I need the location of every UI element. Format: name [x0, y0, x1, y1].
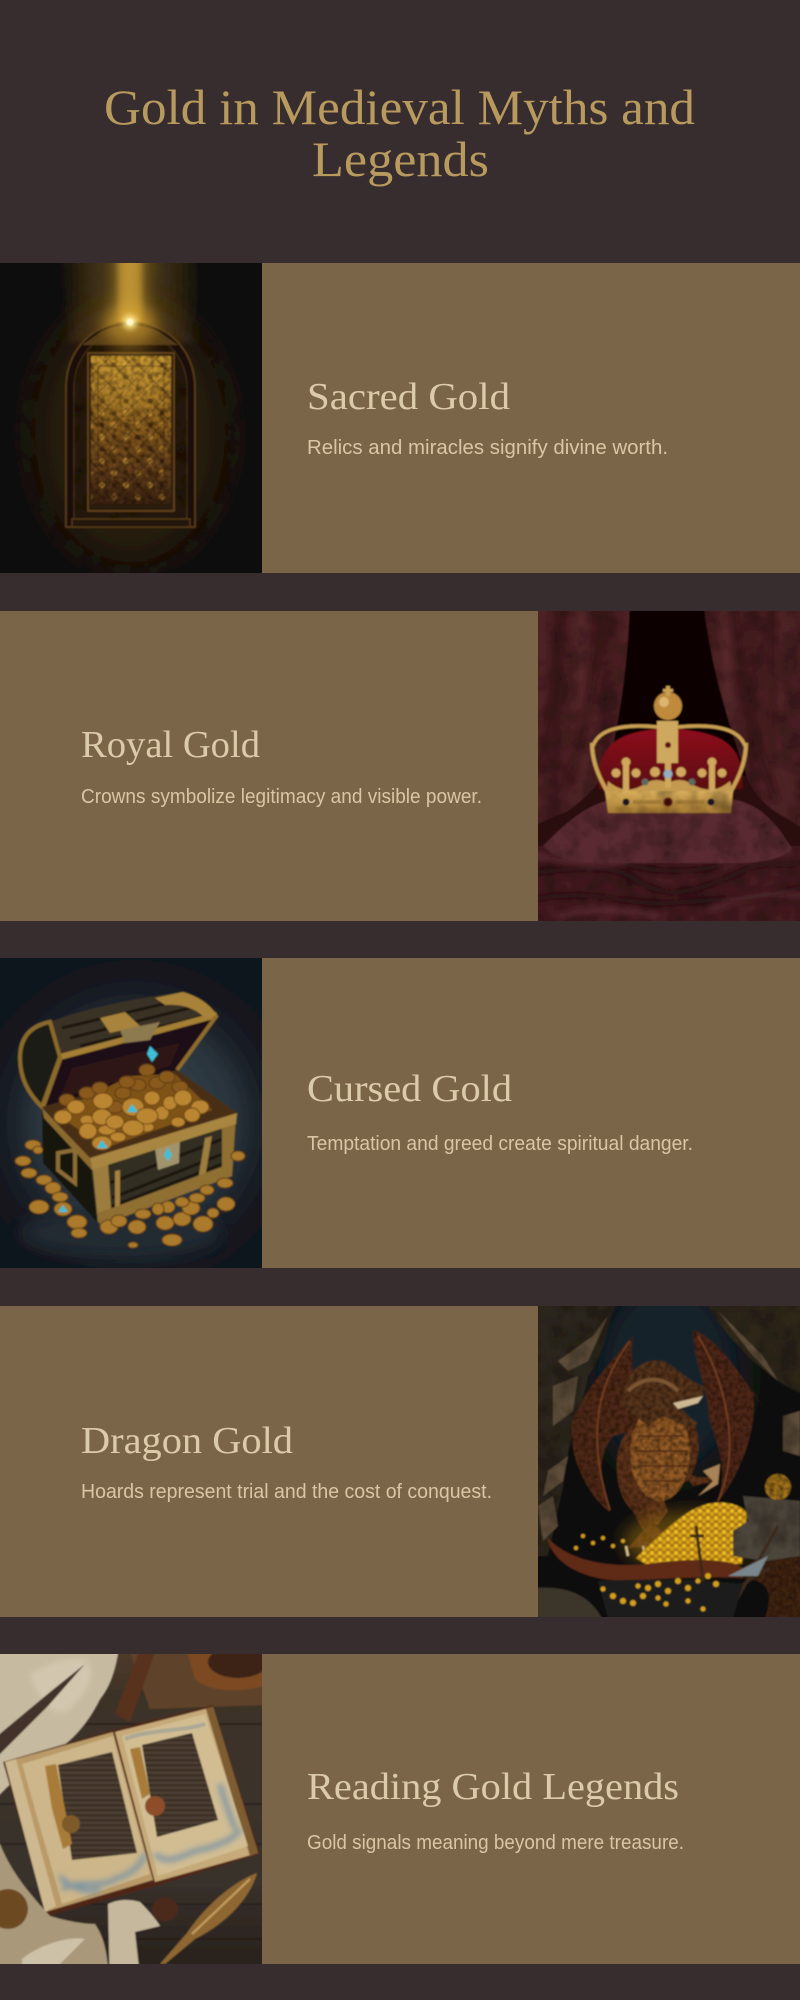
panel: sacred gold [0, 263, 800, 573]
heading: royal gold: Royal Gold [81, 724, 260, 766]
back lid [52, 992, 200, 1054]
heading: reading gold legends: Reading Gold Legends [307, 1766, 679, 1808]
dragon [571, 1330, 777, 1548]
panel: cursed gold [0, 958, 800, 1268]
quill [0, 1664, 85, 1759]
illuminated capitals [45, 1764, 72, 1849]
panel: dragon gold [0, 1306, 800, 1617]
panel: reading gold legends [0, 1654, 800, 1964]
cup [188, 1654, 262, 1691]
ornaments [60, 1854, 145, 1891]
ink roll [115, 1654, 154, 1722]
cloth bottom left [0, 1843, 108, 1964]
rocks and orb [733, 1496, 800, 1561]
image: dragon guarding gold hoard [538, 1306, 800, 1617]
floor coins [15, 1140, 245, 1248]
image: jeweled crown on velvet pillow [538, 611, 800, 921]
title: Legends [312, 131, 489, 187]
text blocks [58, 1752, 137, 1860]
heading: dragon gold: Dragon Gold [81, 1420, 293, 1462]
title: Gold in Medieval Myths and [104, 79, 695, 135]
title [104, 79, 695, 187]
floor coins [574, 1534, 719, 1612]
image: illuminated manuscript on wooden desk [0, 1654, 262, 1964]
sword [690, 1525, 705, 1582]
text: cursed gold description: Temptation and greed create spiritual danger. [307, 1133, 693, 1155]
text: sacred gold description: Relics and miracles signify divine worth. [307, 437, 668, 459]
text: royal gold description: Crowns symbolize legitimacy and visible power. [81, 786, 482, 808]
bottom feather [160, 1873, 257, 1964]
rim and coin pile [42, 1070, 237, 1158]
image: treasure chest spilling coins [0, 958, 262, 1268]
torn paper [106, 1898, 161, 1964]
book [3, 1705, 260, 1916]
chest body [42, 1108, 97, 1222]
panel: royal gold [0, 611, 800, 921]
heading: cursed gold: Cursed Gold [307, 1068, 512, 1110]
cloth top left [0, 1654, 119, 1796]
image: glowing sacred relic [0, 263, 262, 573]
gold pile [623, 1511, 753, 1571]
heading: sacred gold: Sacred Gold [307, 376, 510, 418]
text: reading gold legends description: Gold signals meaning beyond mere treasure. [307, 1832, 684, 1854]
text: dragon gold description: Hoards represent trial and the cost of conquest. [81, 1481, 492, 1503]
tail [547, 1537, 743, 1581]
